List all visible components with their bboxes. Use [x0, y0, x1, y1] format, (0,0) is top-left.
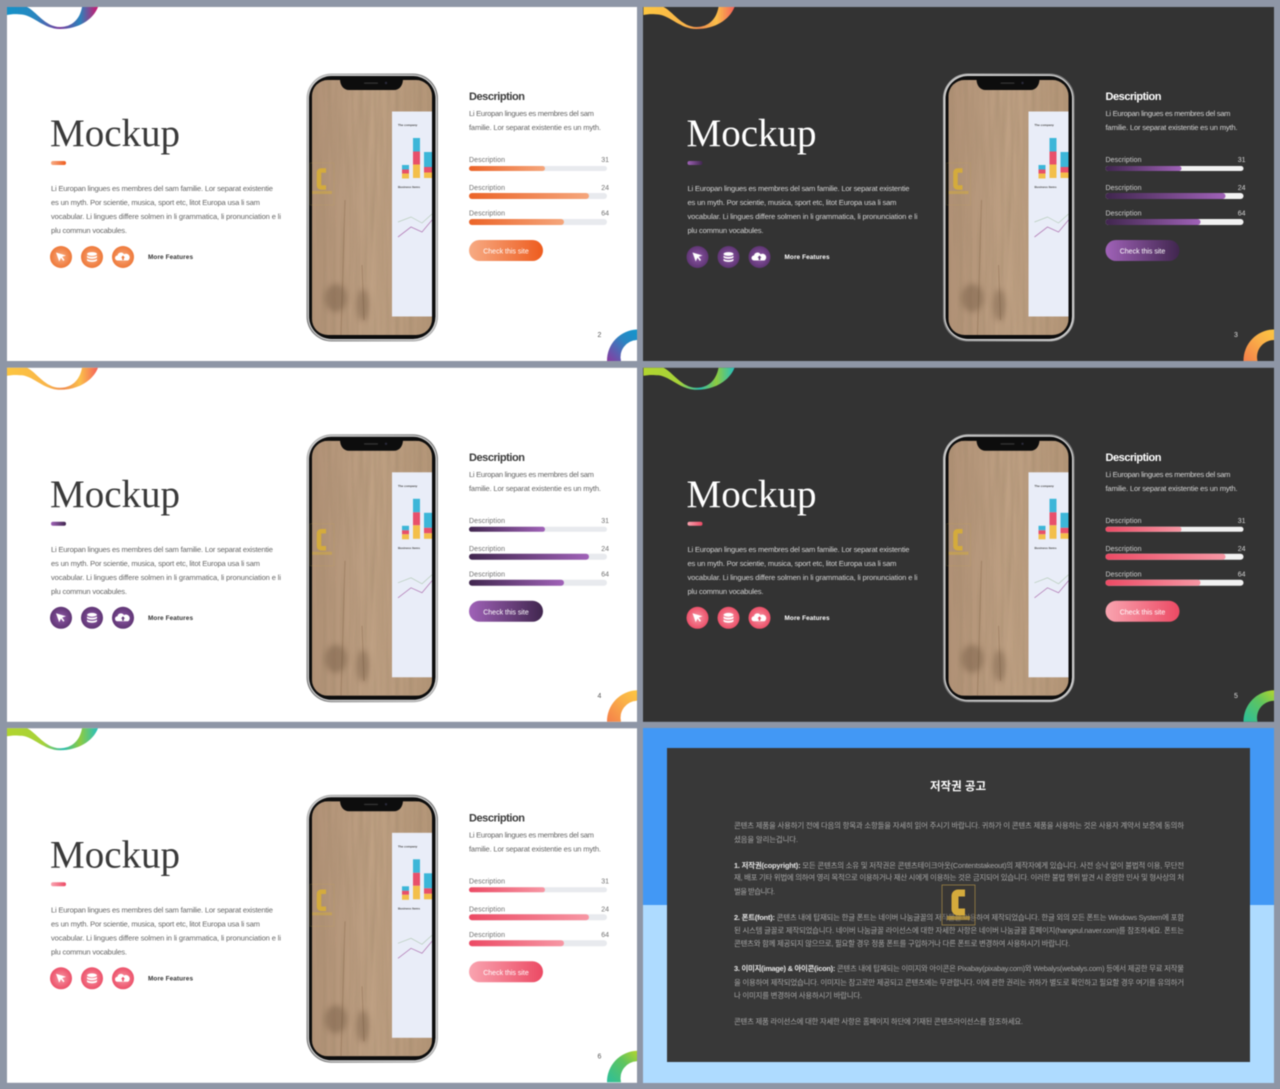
phone mockup: The company: [398, 484, 418, 488]
feature icons: [686, 607, 770, 629]
body text: Li Europan lingues es membres del sam familie. Lor separat existentie: [51, 545, 273, 554]
body text: [688, 545, 918, 596]
phone mockup: [306, 795, 438, 1063]
button: [1106, 601, 1180, 622]
body text: es un myth. Por scientie, musica, sport etc, litot Europa usa li sam: [51, 198, 260, 207]
progress bars: Description: [1106, 518, 1142, 525]
phone mockup: Business Items: [1034, 185, 1057, 189]
phone mockup: [306, 74, 438, 342]
watermark: [942, 885, 975, 925]
copyright title: 저작권 공고: [930, 779, 986, 793]
button: [469, 601, 543, 622]
progress bars: Description: [469, 932, 505, 939]
progress bars: 31: [601, 157, 609, 164]
phone mockup: Business Items: [398, 906, 420, 910]
corner arc: [1243, 330, 1274, 361]
progress bars: 24: [601, 185, 609, 192]
page number: 3: [1234, 332, 1238, 339]
progress bars: [1106, 157, 1246, 225]
phone mockup: The company: [398, 844, 418, 848]
more features label: More Features: [148, 615, 193, 622]
phone mockup: The company: [398, 123, 418, 127]
phone mockup: Business Items: [398, 185, 420, 189]
body text: Li Europan lingues es membres del sam familie. Lor separat existentie: [51, 905, 273, 914]
description text: Li Europan lingues es membres del sam: [469, 470, 594, 479]
license note: 콘텐츠 제품 라이선스에 대한 자세한 사항은 홈페이지 하단에 기재된 콘텐츠라이선스를 참조하세요.: [734, 1017, 1023, 1026]
body text: vocabular. Li lingues differe solmen in li grammatica, li pronunciation e li: [51, 212, 281, 221]
progress bars: Description: [1106, 210, 1142, 218]
ribbon: [7, 7, 98, 29]
progress bars: Description: [469, 878, 505, 885]
more features label: More Features: [784, 254, 830, 261]
button: Check this site: [1120, 609, 1165, 616]
progress bars: 24: [601, 906, 609, 913]
description text: familie. Lor separat existentie es un myth.: [1106, 123, 1238, 132]
progress bars: Description: [469, 906, 505, 913]
phone mockup: Business Items: [1034, 546, 1057, 550]
body text: Li Europan lingues es membres del sam familie. Lor separat existentie: [688, 184, 910, 193]
description text: familie. Lor separat existentie es un myth.: [469, 844, 601, 853]
intro paragraph: [734, 821, 1184, 844]
section 1 copyright: [734, 861, 1184, 896]
progress bars: 31: [601, 518, 609, 525]
slide 4: white, purple accent: [7, 368, 637, 722]
description text: [1106, 109, 1238, 132]
progress bars: 31: [601, 878, 609, 885]
intro paragraph: 콘텐츠 제품을 사용하기 전에 다음의 항목과 소항들을 자세히 읽어 주시기 바랍니다. 귀하가 이 콘텐츠 제품을 사용하는 것은 사용자 계약서 보증에 동의하: [734, 821, 1184, 830]
progress bars: 64: [1238, 210, 1246, 218]
page number: 2: [598, 332, 602, 339]
phone mockup: [943, 434, 1074, 702]
description heading: Description: [1106, 452, 1162, 464]
body text: vocabular. Li lingues differe solmen in li grammatica, li pronunciation e li: [51, 573, 281, 582]
progress bars: Description: [469, 185, 505, 192]
body text: es un myth. Por scientie, musica, sport etc, litot Europa usa li sam: [688, 559, 896, 568]
slide 6: white, pink accent: [7, 728, 637, 1083]
feature icons: [50, 246, 134, 268]
description text: [469, 109, 601, 132]
body text: vocabular. Li lingues differe solmen in li grammatica, li pronunciation e li: [688, 212, 918, 221]
description heading: Description: [469, 812, 525, 824]
accent dash: [688, 522, 702, 526]
description heading: Description: [469, 91, 525, 103]
accent dash: [688, 161, 702, 165]
progress bars: 31: [1238, 157, 1246, 164]
progress bars: 64: [601, 571, 609, 578]
title: Mockup: [50, 112, 180, 155]
progress bars: Description: [1106, 157, 1142, 164]
phone mockup: The company: [1034, 123, 1054, 127]
corner arc: [607, 1051, 637, 1082]
corner arc: [1243, 690, 1274, 722]
progress bars: 24: [1238, 546, 1246, 553]
section 3 image and icon: 을 이용하여 제작되었습니다. 이미지는 참고로만 제공되고 콘텐츠에는 무관합니다. 이에 관한 권리는 귀하가 별도로 확인하고 필요할 경우 여기를 유의하거: [734, 978, 1184, 987]
progress bars: 64: [1238, 571, 1246, 578]
description text: Li Europan lingues es membres del sam: [469, 109, 594, 118]
progress bars: [1106, 518, 1246, 586]
section 1 copyright: 1. 저작권(copyright): 모든 콘텐츠의 소유 및 저작권은 콘텐츠테이크아웃(Contentstakeout)의 제작자에게 있습니다. 사전 승낙 없이 불법적 이용, 무단전: [734, 861, 1184, 870]
body text: plu commun vocabules.: [51, 947, 127, 956]
progress bars: 31: [1238, 518, 1246, 525]
body text: [51, 184, 281, 235]
body text: plu commun vocabules.: [688, 587, 764, 596]
phone mockup: [306, 434, 438, 702]
section 3 image and icon: 3. 이미지(image) & 아이콘(icon): 콘텐츠 내에 탑재되는 이미지와 아이콘은 Pixabay(pixabay.com)와 Webalys(webalys.com) 등에서 제공한 무료 저작물: [734, 964, 1184, 973]
corner arc: [607, 330, 637, 361]
progress bars: Description: [469, 571, 505, 578]
button: Check this site: [483, 248, 529, 256]
button: Check this site: [1120, 248, 1165, 256]
slide 5: dark, pink accent: [643, 368, 1274, 722]
description text: [469, 830, 601, 853]
body text: vocabular. Li lingues differe solmen in li grammatica, li pronunciation e li: [51, 933, 281, 942]
more features label: More Features: [148, 254, 193, 261]
title: Mockup: [50, 833, 180, 876]
page number: 4: [598, 693, 602, 700]
phone mockup: Business Items: [398, 546, 420, 550]
section 3 image and icon: 나 이미지를 변경하여 사용하시기 바랍니다.: [734, 991, 862, 1000]
title: Mockup: [686, 112, 816, 155]
ribbon: [644, 7, 734, 29]
more features label: More Features: [784, 615, 830, 622]
ribbon: [7, 368, 98, 390]
section 2 font: [734, 913, 1184, 948]
progress bars: 64: [601, 932, 609, 939]
section 2 font: 콘텐츠와 함께 제공되지 않으므로, 필요할 경우 정품 폰트를 구입하거나 다른 폰트로 변경하여 사용하시기 바랍니다.: [734, 939, 1070, 948]
progress bars: Description: [1106, 185, 1142, 192]
button: [1106, 240, 1180, 261]
description heading: Description: [469, 452, 525, 464]
body text: plu commun vocabules.: [51, 587, 127, 596]
body text: es un myth. Por scientie, musica, sport etc, litot Europa usa li sam: [51, 559, 260, 568]
corner arc: [607, 690, 637, 722]
title: Mockup: [50, 473, 180, 516]
description text: Li Europan lingues es membres del sam: [1106, 109, 1230, 118]
progress bars: [469, 878, 609, 946]
body text: [688, 184, 918, 235]
body text: vocabular. Li lingues differe solmen in li grammatica, li pronunciation e li: [688, 573, 918, 582]
section 3 image and icon: [734, 964, 1184, 1000]
description text: [1106, 470, 1238, 493]
button: [469, 240, 543, 261]
body text: es un myth. Por scientie, musica, sport etc, litot Europa usa li sam: [688, 198, 896, 207]
progress bars: Description: [469, 518, 505, 525]
progress bars: Description: [469, 546, 505, 553]
body text: plu commun vocabules.: [51, 226, 127, 235]
button: [469, 961, 543, 982]
button: Check this site: [483, 970, 529, 977]
feature icons: [50, 607, 134, 629]
section 1 copyright: 벌을 받습니다.: [734, 887, 775, 896]
accent dash: [51, 882, 66, 886]
ribbon: [644, 368, 734, 390]
progress bars: [469, 157, 609, 225]
slide 3: dark, purple accent: [643, 7, 1274, 361]
body text: [51, 905, 281, 956]
description text: Li Europan lingues es membres del sam: [1106, 470, 1230, 479]
panel: copyright notice: [643, 728, 1274, 1083]
body text: Li Europan lingues es membres del sam familie. Lor separat existentie: [688, 545, 910, 554]
progress bars: [469, 518, 609, 586]
accent dash: [51, 161, 66, 165]
progress bars: Description: [1106, 571, 1142, 578]
button: Check this site: [483, 609, 529, 616]
progress bars: 24: [601, 546, 609, 553]
section 2 font: 된 시스템 글꼴로 제작되었습니다. 네이버 나눔글꼴 라이선스에 대한 자세한 사항은 네이버 나눔글꼴 홈페이지(hangeul.naver.com)를 참조하세요. 폰트는: [734, 926, 1184, 935]
description text: [469, 470, 601, 493]
accent dash: [51, 522, 66, 526]
feature icons: [686, 246, 770, 268]
intro paragraph: 셨음을 알리는겁니다.: [734, 835, 798, 844]
progress bars: Description: [1106, 546, 1142, 553]
progress bars: 64: [601, 210, 609, 218]
progress bars: 24: [1238, 185, 1246, 192]
page number: 5: [1234, 693, 1238, 700]
description text: familie. Lor separat existentie es un myth.: [1106, 484, 1238, 493]
phone mockup: [943, 74, 1074, 342]
feature icons: [50, 967, 134, 989]
section 2 font: 2. 폰트(font): 콘텐츠 내에 탑재되는 한글 폰트는 네이버 나눔글꼴의 저작물을 이용하여 제작되었습니다. 한글 외의 모든 폰트는 Windows System에 포함: [734, 913, 1184, 922]
title: Mockup: [686, 473, 816, 516]
page number: 6: [598, 1053, 602, 1060]
body text: [51, 545, 281, 596]
description text: familie. Lor separat existentie es un myth.: [469, 484, 601, 493]
ribbon: [7, 728, 98, 750]
body text: Li Europan lingues es membres del sam familie. Lor separat existentie: [51, 184, 273, 193]
progress bars: Description: [469, 157, 505, 164]
body text: plu commun vocabules.: [688, 226, 764, 235]
progress bars: Description: [469, 210, 505, 218]
slide 2: white, orange accent: [7, 7, 637, 361]
body text: es un myth. Por scientie, musica, sport etc, litot Europa usa li sam: [51, 919, 260, 928]
description heading: Description: [1106, 91, 1162, 103]
phone mockup: The company: [1034, 484, 1054, 488]
description text: Li Europan lingues es membres del sam: [469, 830, 594, 839]
section 1 copyright: 재, 배포 기타 위법에 의하여 영리 목적으로 이용하거나 재산 시에게 이용하는 것은 금지되어 있습니다. 이러한 불법 행위 발견 시 준엄한 민사 및 형사상의 처: [734, 873, 1184, 882]
more features label: More Features: [148, 975, 193, 982]
description text: familie. Lor separat existentie es un myth.: [469, 123, 601, 132]
